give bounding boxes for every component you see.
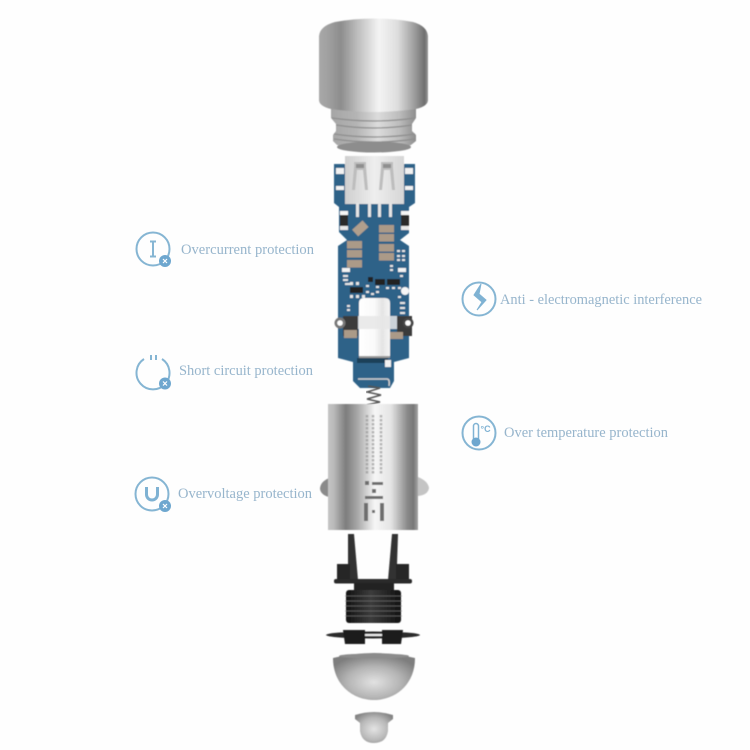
threaded shaft — [346, 590, 401, 623]
body cylinder — [328, 404, 418, 530]
usb port — [345, 156, 404, 217]
label: Short circuit protection — [179, 363, 314, 379]
metal tip — [355, 712, 393, 743]
circuit board — [334, 156, 415, 388]
right side bump — [418, 477, 429, 496]
left side bump — [320, 478, 329, 497]
metal body — [320, 404, 429, 530]
fine print — [367, 415, 381, 474]
icon: overcurrent — [136, 232, 171, 267]
cap cylinder — [319, 18, 428, 112]
icon: voltage — [136, 478, 171, 512]
icon: thermometer: °C — [480, 424, 491, 434]
audio jack block — [357, 298, 391, 367]
board outline — [334, 164, 415, 388]
feature: short circuit protection — [136, 355, 314, 390]
flange — [334, 579, 412, 584]
label: Over temperature protection — [504, 425, 669, 441]
metal dome — [333, 653, 415, 700]
usb tab slots — [336, 168, 413, 190]
metal clip — [334, 316, 414, 339]
feature: overcurrent protection — [136, 232, 315, 267]
feature: overvoltage protection — [136, 478, 313, 512]
label: Overcurrent protection — [181, 242, 315, 258]
spring — [367, 386, 381, 405]
feature: over temperature protection — [462, 416, 669, 450]
feature: anti-electromagnetic interference — [462, 282, 702, 316]
icon: thermometer — [462, 416, 496, 450]
prongs — [348, 534, 398, 580]
metal top cap — [319, 18, 428, 152]
ZMI logo — [364, 481, 384, 521]
icon: lightning — [462, 282, 496, 316]
contact wire — [358, 379, 389, 386]
threaded neck — [331, 108, 416, 152]
capacitors and chips — [340, 211, 409, 314]
black retaining ring — [326, 630, 420, 644]
black plastic insert — [334, 534, 412, 623]
label: Anti - electromagnetic interference — [500, 292, 702, 308]
icon: power — [136, 355, 171, 390]
label: Overvoltage protection — [178, 486, 313, 502]
